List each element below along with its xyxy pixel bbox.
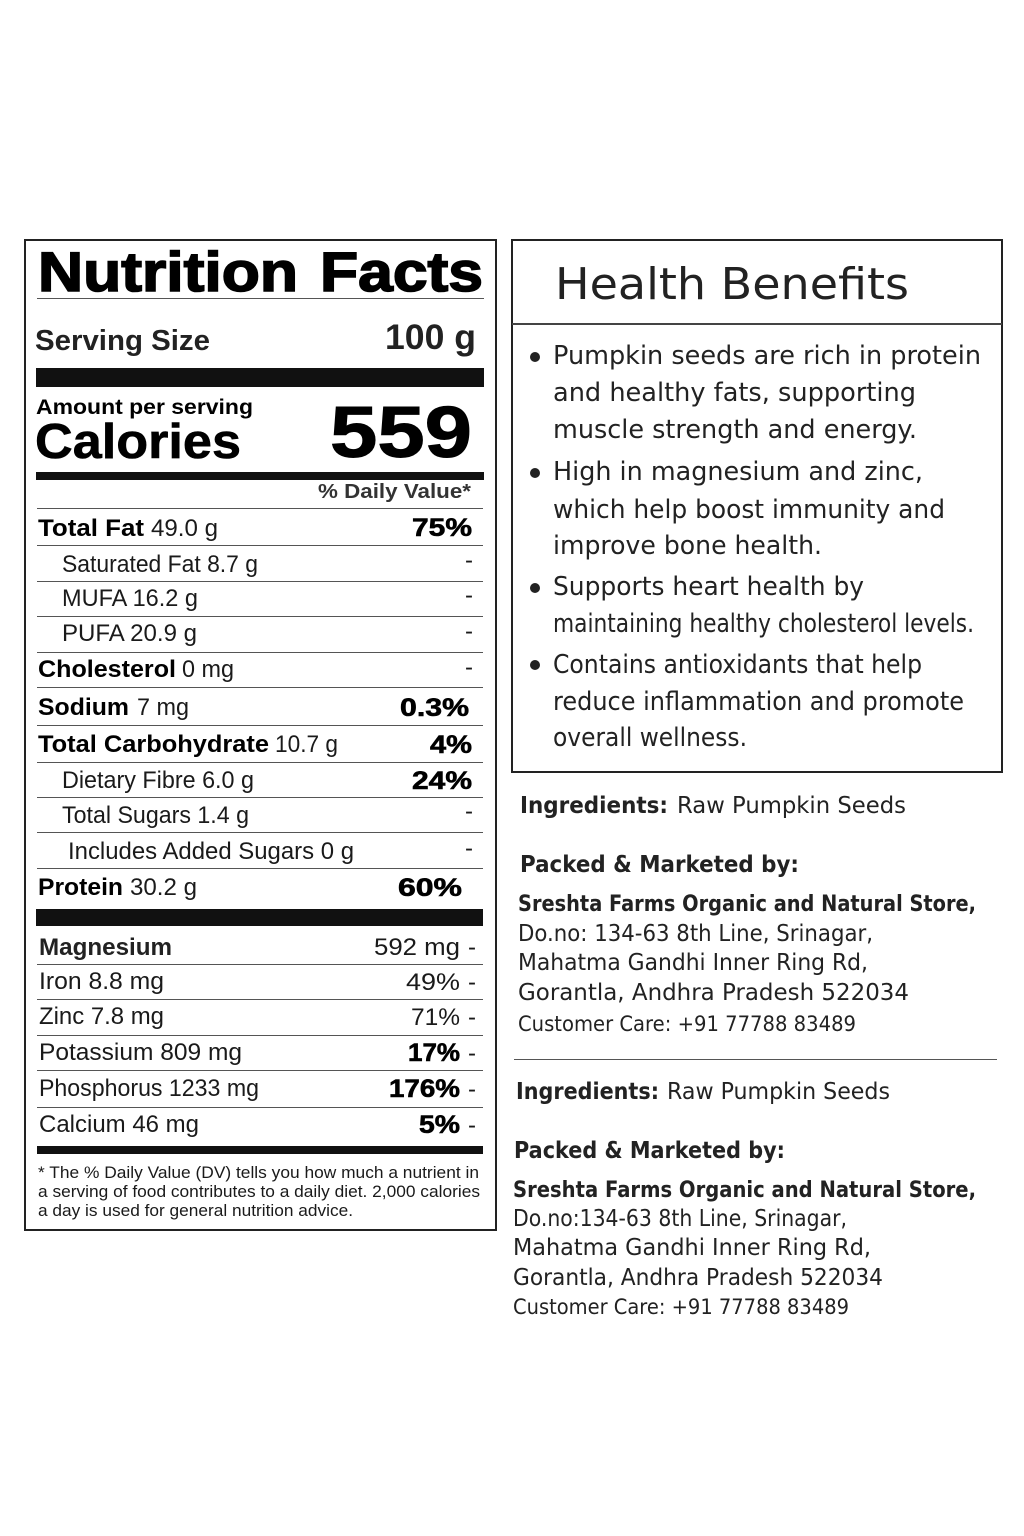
nutrient table: minerals: 71% bbox=[411, 1004, 460, 1031]
nutrient table: macronutrients: - bbox=[465, 798, 473, 825]
nutrient table: macronutrients: - bbox=[465, 582, 473, 609]
benefit: magnesium and zinc bbox=[530, 457, 945, 561]
nutrient table: minerals: 5% bbox=[419, 1111, 460, 1139]
footnote bbox=[38, 1163, 480, 1220]
ingredients and address block: lower: Sreshta Farms Organic and Natural Store, bbox=[513, 1178, 976, 1203]
nutrient table: macronutrients bbox=[37, 514, 483, 902]
title: Nutrition Facts: Facts bbox=[320, 240, 483, 303]
benefit: protein: muscle strength and energy. bbox=[553, 415, 917, 445]
nutrient table: macronutrients: - bbox=[465, 835, 473, 862]
ingredients and address block: lower bbox=[513, 1079, 976, 1319]
serving size row: Serving Size bbox=[35, 325, 210, 357]
benefit: antioxidants bbox=[530, 650, 964, 753]
ingredients and address block: lower: Mahatma Gandhi Inner Ring Rd, bbox=[513, 1235, 871, 1261]
ingredients and address block: upper: Raw Pumpkin Seeds bbox=[677, 793, 906, 819]
calories block bbox=[35, 393, 472, 473]
nutrient table: macronutrients: - bbox=[465, 618, 473, 645]
panel: nutrition facts bbox=[25, 240, 496, 1230]
ingredients and address block: upper: Sreshta Farms Organic and Natural Store, bbox=[518, 892, 976, 917]
nutrient table: macronutrients: MUFA 16.2 g bbox=[62, 585, 198, 612]
nutrient table: minerals: - bbox=[468, 1040, 476, 1067]
nutrient table: macronutrients: Dietary Fibre 6.0 g bbox=[62, 767, 254, 794]
nutrient table: macronutrients: 49.0 g bbox=[151, 515, 218, 542]
footnote: a serving of food contributes to a daily diet. 2,000 calories bbox=[38, 1182, 480, 1201]
nutrient table: minerals: Iron 8.8 mg bbox=[39, 968, 164, 995]
nutrient table: macronutrients: Saturated Fat 8.7 g bbox=[62, 551, 258, 578]
nutrient table: macronutrients: PUFA 20.9 g bbox=[62, 620, 197, 647]
calories block: Amount per serving bbox=[36, 396, 253, 419]
benefit: antioxidants: reduce inflammation and promote bbox=[553, 687, 964, 717]
title: Nutrition Facts: Nutrition bbox=[38, 240, 298, 303]
nutrient table: minerals: - bbox=[468, 1076, 476, 1103]
benefit: protein bbox=[530, 341, 981, 445]
calories block: 559 bbox=[330, 393, 472, 473]
nutrient table: macronutrients: 0.3% bbox=[400, 694, 469, 722]
nutrient table: minerals: Potassium 809 mg bbox=[39, 1039, 242, 1066]
nutrient table: macronutrients: 30.2 g bbox=[130, 874, 197, 901]
nutrient table: macronutrients: 7 mg bbox=[137, 694, 189, 721]
nutrient table: macronutrients: - bbox=[465, 547, 473, 574]
nutrient table: macronutrients: Total Carbohydrate bbox=[38, 731, 269, 758]
benefit: protein: and healthy fats, supporting bbox=[553, 378, 916, 408]
nutrient table: macronutrients: Cholesterol bbox=[38, 656, 176, 683]
nutrient table: minerals: - bbox=[468, 1004, 476, 1031]
footnote: * The % Daily Value (DV) tells you how much a nutrient in bbox=[38, 1163, 479, 1182]
serving size row bbox=[35, 318, 476, 357]
benefit: magnesium and zinc: High in magnesium and zinc, bbox=[553, 457, 923, 487]
nutrient table: macronutrients: Total Fat bbox=[38, 515, 144, 542]
nutrient table: minerals bbox=[37, 934, 483, 1139]
calories block: Calories bbox=[35, 415, 241, 469]
nutrient table: minerals: 17% bbox=[408, 1039, 460, 1067]
benefit: antioxidants: Contains antioxidants that help bbox=[553, 650, 922, 680]
nutrient table: macronutrients: Includes Added Sugars 0 g bbox=[68, 838, 354, 865]
nutrient table: minerals: Magnesium bbox=[39, 934, 172, 961]
nutrient table: minerals: Phosphorus 1233 mg bbox=[39, 1075, 259, 1102]
nutrient table: minerals: - bbox=[468, 934, 476, 961]
ingredients and address block: upper: Do.no: 134-63 8th Line, Srinagar, bbox=[518, 921, 873, 947]
ingredients and address block: lower: Ingredients: bbox=[516, 1079, 659, 1105]
ingredients and address block: upper bbox=[518, 793, 976, 1036]
nutrient table: minerals: Zinc 7.8 mg bbox=[39, 1003, 164, 1030]
footnote: a day is used for general nutrition advice. bbox=[38, 1201, 353, 1220]
benefit: magnesium and zinc: improve bone health. bbox=[553, 531, 822, 561]
ingredients and address block: upper: Packed & Marketed by: bbox=[520, 852, 799, 878]
nutrient table: minerals: - bbox=[468, 969, 476, 996]
daily value heading: % Daily Value* bbox=[318, 481, 471, 503]
nutrient table: macronutrients: 0 mg bbox=[182, 656, 234, 683]
nutrient table: macronutrients: Total Sugars 1.4 g bbox=[62, 802, 249, 829]
heading: Health Benefits: Health Benefits bbox=[555, 259, 909, 310]
nutrient table: minerals: 176% bbox=[389, 1075, 460, 1103]
benefit: heart health: Supports heart health by bbox=[553, 572, 864, 602]
benefit: heart health bbox=[530, 572, 974, 639]
nutrient table: minerals: - bbox=[468, 1112, 476, 1139]
nutrient table: macronutrients: 10.7 g bbox=[275, 731, 338, 758]
ingredients and address block: upper: Mahatma Gandhi Inner Ring Rd, bbox=[518, 950, 868, 976]
benefit: magnesium and zinc: which help boost immunity and bbox=[553, 495, 945, 525]
ingredients and address block: upper: Customer Care: +91 77788 83489 bbox=[518, 1012, 856, 1036]
ingredients and address block: lower: Gorantla, Andhra Pradesh 522034 bbox=[513, 1265, 883, 1291]
ingredients and address block: lower: Do.no:134-63 8th Line, Srinagar, bbox=[513, 1206, 847, 1232]
title: Nutrition Facts bbox=[38, 240, 483, 303]
ingredients and address block: lower: Customer Care: +91 77788 83489 bbox=[513, 1295, 849, 1319]
serving size row: 100 g bbox=[385, 318, 476, 357]
nutrient table: minerals: 592 mg bbox=[374, 934, 460, 961]
nutrient table: macronutrients: 75% bbox=[412, 514, 472, 542]
benefit: antioxidants: overall wellness. bbox=[553, 723, 747, 753]
nutrient table: macronutrients: Sodium bbox=[38, 694, 129, 721]
panel: health benefits bbox=[512, 240, 1002, 772]
ingredients and address block: lower: Raw Pumpkin Seeds bbox=[667, 1079, 890, 1105]
nutrient table: macronutrients: 24% bbox=[412, 767, 472, 795]
nutrient table: minerals: 49% bbox=[406, 969, 460, 996]
nutrient table: macronutrients: 4% bbox=[430, 731, 472, 759]
nutrient table: minerals: Calcium 46 mg bbox=[39, 1111, 199, 1138]
benefit: protein: Pumpkin seeds are rich in protein bbox=[553, 341, 981, 371]
ingredients and address block: lower: Packed & Marketed by: bbox=[514, 1138, 785, 1164]
ingredients and address block: upper: Gorantla, Andhra Pradesh 522034 bbox=[518, 980, 909, 1006]
nutrient table: macronutrients: 60% bbox=[398, 874, 462, 902]
ingredients and address block: upper: Ingredients: bbox=[520, 793, 668, 819]
nutrient table: macronutrients: - bbox=[465, 654, 473, 681]
nutrient table: macronutrients: Protein bbox=[38, 874, 123, 901]
